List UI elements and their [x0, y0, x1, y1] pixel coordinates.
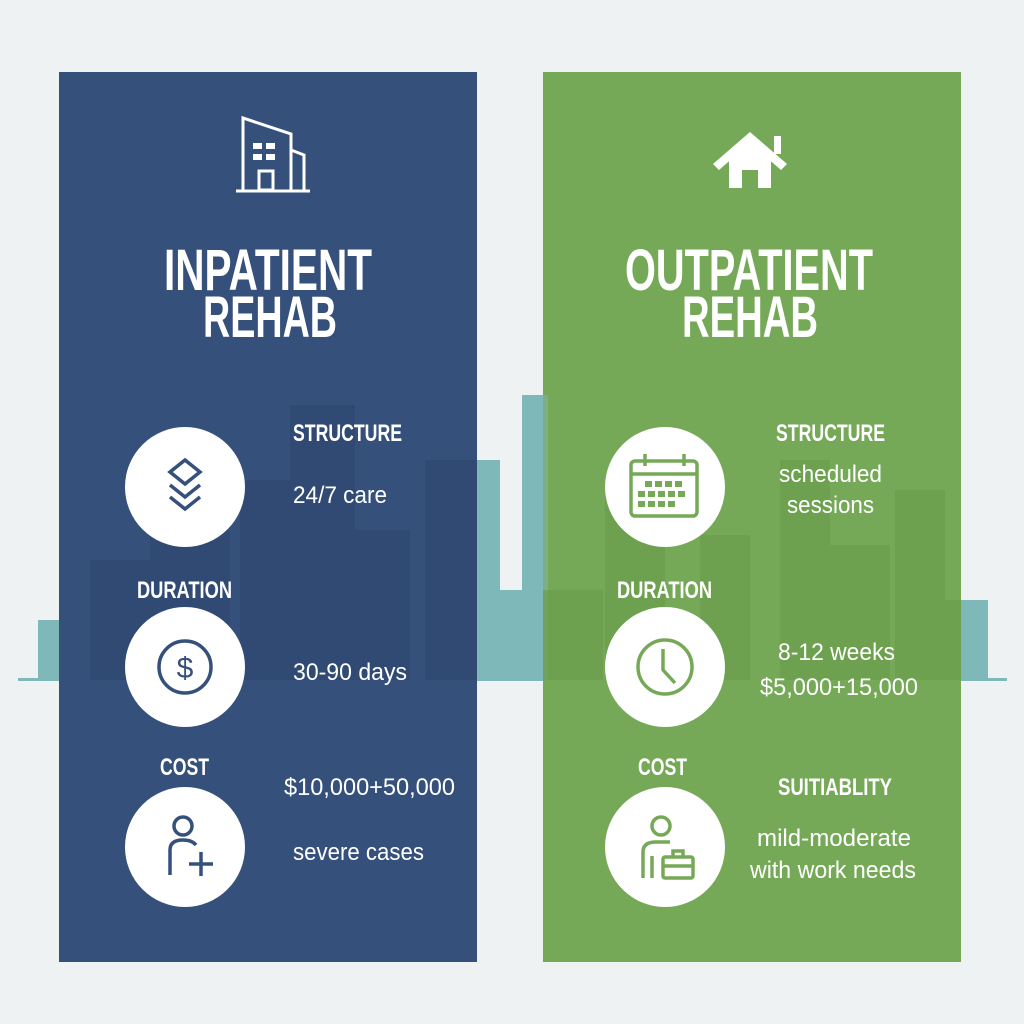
icon circle: person briefcase: [605, 787, 725, 907]
title: outpatient rehab: REHAB: [682, 285, 818, 350]
text: inpatient details: 24/7 care: [293, 482, 387, 509]
text: outpatient details: 8-12 weeks: [778, 639, 895, 666]
text: outpatient details: scheduled: [779, 461, 882, 488]
text: outpatient details: $5,000+15,000: [760, 674, 918, 701]
title: inpatient rehab: REHAB: [203, 285, 337, 350]
text: outpatient details: SUITIABLITY: [778, 774, 892, 801]
icon circle: dollar: $: [177, 652, 194, 685]
skyline background: [18, 395, 1007, 681]
title: outpatient rehab: [625, 238, 873, 350]
icon circle: clock: [605, 607, 725, 727]
text: inpatient details: 30-90 days: [293, 659, 407, 686]
text: outpatient details: DURATION: [617, 577, 712, 604]
text: inpatient details: COST: [160, 754, 209, 781]
text: outpatient details: with work needs: [749, 857, 916, 884]
text: inpatient details: DURATION: [137, 577, 232, 604]
panel: outpatient: [543, 72, 961, 962]
text: outpatient details: sessions: [787, 492, 874, 519]
icon circle: calendar: [605, 427, 725, 547]
title: inpatient rehab: INPATIENT: [164, 238, 372, 303]
icon circle: layers: [125, 427, 245, 547]
text: outpatient details: [617, 420, 918, 884]
icon: building: [236, 118, 310, 191]
text: inpatient details: [137, 420, 455, 866]
panel: inpatient: [59, 72, 477, 962]
text: inpatient details: severe cases: [293, 839, 424, 866]
title: outpatient rehab: OUTPATIENT: [625, 238, 873, 303]
title: inpatient rehab: [164, 238, 372, 350]
icon: house: [713, 132, 787, 188]
icon circle: person plus: [125, 787, 245, 907]
icon circle: dollar: [125, 607, 245, 727]
text: outpatient details: STRUCTURE: [776, 420, 885, 447]
text: outpatient details: mild-moderate: [757, 825, 911, 852]
text: inpatient details: STRUCTURE: [293, 420, 402, 447]
text: inpatient details: $10,000+50,000: [284, 774, 455, 801]
text: outpatient details: COST: [638, 754, 687, 781]
